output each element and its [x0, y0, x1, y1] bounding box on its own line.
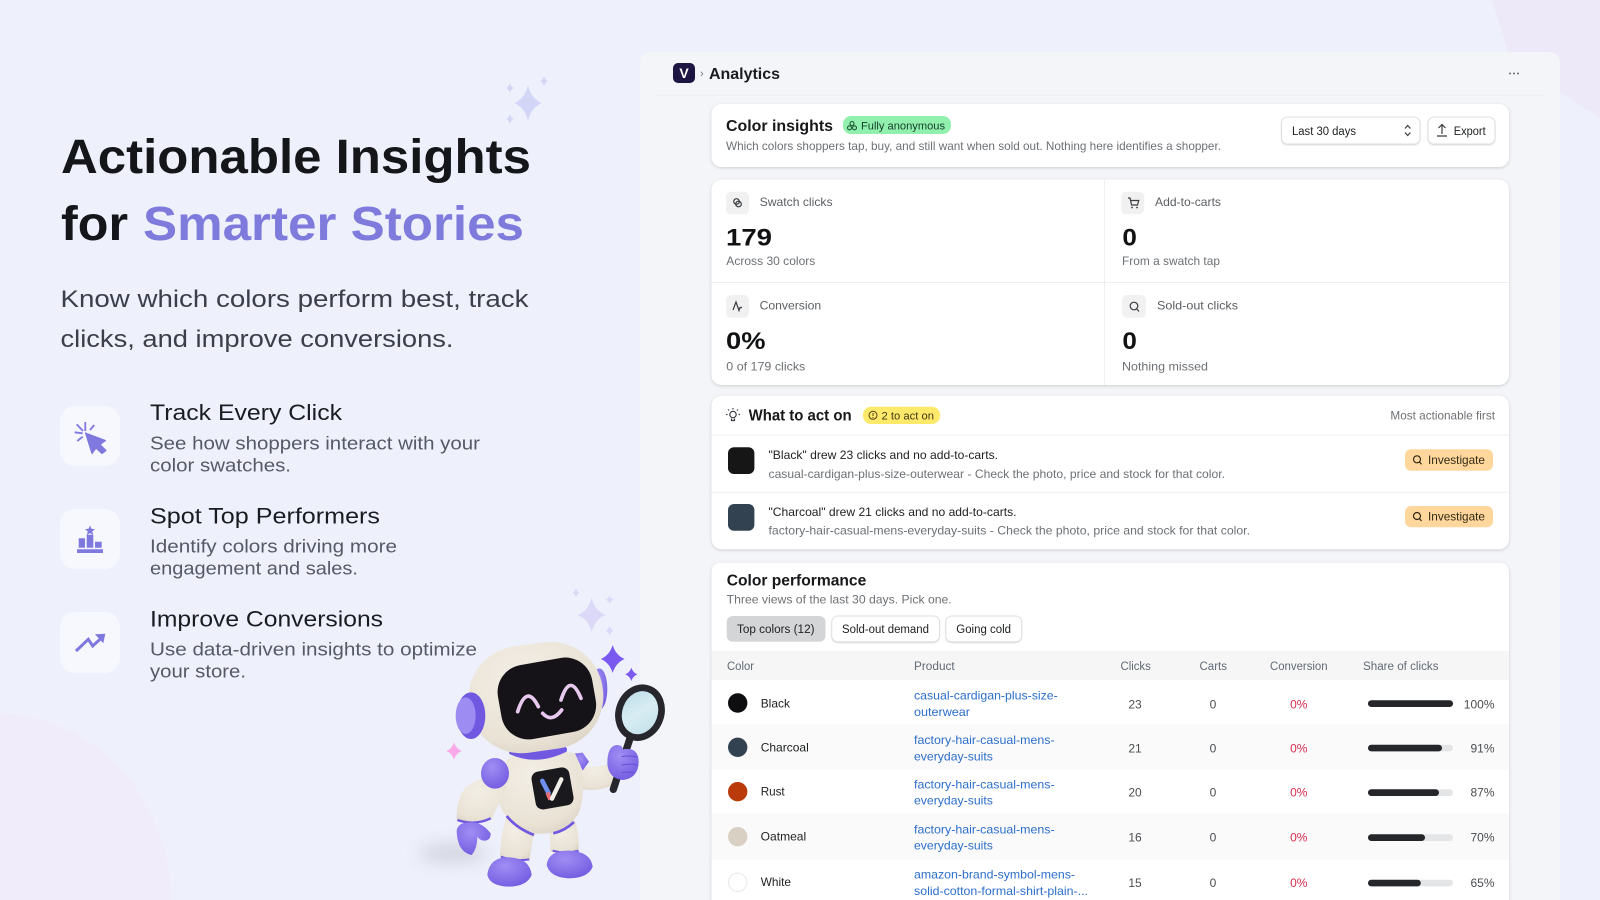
row: black: 0% — [1290, 697, 1308, 711]
table header: Share of clicks — [1363, 661, 1439, 673]
row: rust: everyday-suits — [914, 794, 993, 808]
button: export — [1428, 117, 1495, 144]
row: charcoal: 91% — [1470, 741, 1495, 755]
button: export: Export — [1454, 126, 1486, 138]
app header: V — [679, 65, 689, 81]
row: black: 100% — [1464, 697, 1495, 711]
action row: charcoal: factory-hair-casual-mens-everyday-suits - Check the photo, price and stock for that color. — [768, 524, 1250, 538]
row: charcoal — [728, 733, 1495, 763]
button: investigate: Investigate — [1428, 510, 1485, 524]
row: white: solid-cotton-formal-shirt-plain-... — [914, 884, 1088, 898]
row: rust: 20 — [1128, 786, 1142, 800]
button: investigate: Investigate — [1428, 453, 1485, 467]
stat: swatch clicks — [726, 192, 833, 268]
hand gripping handle — [607, 745, 639, 780]
table header: Product — [914, 661, 956, 673]
row: rust: 0 — [1210, 786, 1217, 800]
panel: color performance — [712, 563, 1509, 900]
panel: color insights header: Color insights — [726, 118, 833, 135]
table header — [712, 651, 1509, 680]
feature: improve conversions — [60, 606, 477, 681]
row: white — [728, 867, 1495, 898]
row: oatmeal: 0 — [1210, 831, 1217, 845]
row: rust: 0% — [1290, 786, 1308, 800]
table: color performance — [712, 651, 1509, 898]
panel: analytics app window — [640, 52, 1560, 900]
stat: sold-out clicks — [1122, 295, 1238, 374]
row: white: 65% — [1470, 876, 1495, 890]
feature: track every click — [60, 400, 480, 475]
row: charcoal: 0 — [1210, 741, 1217, 755]
tabs: Sold-out demand — [842, 624, 929, 636]
stat: swatch clicks: 179 — [726, 225, 772, 252]
stat: conversion — [726, 295, 821, 374]
action row: black — [728, 447, 1493, 481]
row: white: 0% — [1290, 876, 1308, 890]
row: charcoal: Charcoal — [761, 740, 809, 754]
stat: conversion: 0% — [726, 328, 766, 355]
feature: spot top performers: engagement and sales. — [150, 558, 358, 578]
body — [495, 746, 589, 835]
left arm and hand — [457, 758, 509, 855]
icon: podium with star — [60, 509, 120, 569]
feature: spot top performers: Identify colors driving more — [150, 536, 397, 556]
title: Actionable Insights — [61, 131, 531, 184]
stat: swatch clicks: Across 30 colors — [726, 254, 815, 268]
row: rust: 87% — [1470, 786, 1495, 800]
row: rust: factory-hair-casual-mens- — [914, 777, 1055, 791]
panel: color performance: Three views of the last 30 days. Pick one. — [727, 592, 952, 606]
row: white: amazon-brand-symbol-mens- — [914, 867, 1075, 881]
robot mascot with magnifying glass — [418, 588, 668, 887]
tabs: Going cold — [956, 624, 1011, 636]
row: charcoal: 21 — [1128, 741, 1142, 755]
stat: sold-out clicks: Nothing missed — [1122, 360, 1208, 374]
row: black: 0 — [1210, 697, 1217, 711]
panel: what to act on: What to act on — [749, 407, 852, 424]
action row: charcoal — [728, 504, 1493, 538]
subtitle: Know which colors perform best, track — [60, 286, 530, 313]
row: black — [728, 688, 1495, 719]
panel: what to act on — [712, 396, 1509, 549]
panel: what to act on: Most actionable first — [1390, 408, 1496, 422]
row: oatmeal: everyday-suits — [914, 839, 993, 853]
dropdown: last 30 days: Last 30 days — [1292, 126, 1356, 138]
panel: color insights header: Which colors shoppers tap, buy, and still want when sold out. Nothing here identifies a shopper. — [726, 139, 1221, 153]
badge: fully anonymous: Fully anonymous — [861, 120, 945, 132]
row: white: 15 — [1128, 876, 1142, 890]
icon: trend arrow — [60, 612, 120, 673]
icon: click cursor — [60, 406, 120, 466]
row: charcoal: everyday-suits — [914, 749, 993, 763]
panel: stats grid — [712, 180, 1509, 385]
row: oatmeal: 16 — [1128, 831, 1142, 845]
stat: add-to-carts: From a swatch tap — [1122, 254, 1220, 268]
table header: Clicks — [1120, 661, 1151, 673]
chest logo — [530, 766, 575, 811]
button: investigate — [1405, 506, 1493, 527]
row: black: casual-cardigan-plus-size- — [914, 688, 1058, 702]
row: oatmeal: factory-hair-casual-mens- — [914, 822, 1055, 836]
sparkles around robot — [446, 588, 637, 760]
row: oatmeal: 70% — [1470, 831, 1495, 845]
row: rust — [728, 777, 1495, 808]
app header: › — [700, 68, 704, 80]
action row: charcoal: "Charcoal" drew 21 clicks and no add-to-carts. — [768, 505, 1016, 519]
stat: conversion: 0 of 179 clicks — [726, 360, 805, 374]
app header: Analytics — [709, 66, 780, 83]
stat: sold-out clicks: Sold-out clicks — [1157, 298, 1238, 312]
row: oatmeal: 0% — [1290, 831, 1308, 845]
dropdown: last 30 days — [1282, 117, 1420, 144]
badge: 2 to act on: 2 to act on — [882, 410, 934, 422]
feature: improve conversions: Use data-driven insights to optimize — [150, 639, 477, 659]
app header — [673, 63, 1519, 83]
table header: Conversion — [1270, 661, 1328, 673]
table header: Carts — [1200, 661, 1227, 673]
action row: black: casual-cardigan-plus-size-outerwear - Check the photo, price and stock for that color. — [768, 467, 1225, 481]
panel: color insights header — [712, 104, 1509, 167]
stat: swatch clicks: Swatch clicks — [760, 195, 833, 209]
stat: conversion: Conversion — [760, 298, 821, 312]
icon: light bulb — [726, 408, 740, 420]
magnifying glass — [612, 682, 668, 789]
row: white: 0 — [1210, 876, 1217, 890]
tabs — [727, 616, 1022, 642]
badge: 2 to act on — [863, 407, 940, 424]
sparkles above title — [506, 76, 548, 124]
head — [456, 635, 610, 760]
badge: fully anonymous — [843, 116, 951, 134]
legs and feet — [487, 818, 593, 887]
subtitle: clicks, and improve conversions. — [60, 326, 454, 353]
button: investigate — [1405, 449, 1493, 471]
tabs: Top colors (12) — [737, 624, 815, 636]
row: black: 23 — [1128, 697, 1142, 711]
feature: improve conversions: Improve Conversions — [150, 606, 383, 631]
row: charcoal: factory-hair-casual-mens- — [914, 733, 1055, 747]
feature: track every click: See how shoppers interact with your — [150, 433, 480, 453]
stat: add-to-carts: Add-to-carts — [1155, 195, 1221, 209]
row: oatmeal: Oatmeal — [761, 830, 806, 844]
table header: Color — [727, 661, 754, 673]
feature: improve conversions: your store. — [150, 661, 246, 681]
title: Smarter Stories — [143, 198, 524, 251]
row: black: Black — [761, 696, 791, 710]
feature: track every click: color swatches. — [150, 455, 291, 475]
far arm — [578, 762, 617, 790]
visor face — [493, 653, 600, 744]
feature: spot top performers — [60, 503, 397, 578]
title — [61, 131, 531, 251]
feature: spot top performers: Spot Top Performers — [150, 503, 380, 528]
subtitle — [60, 286, 530, 353]
action row: black: "Black" drew 23 clicks and no add-to-carts. — [768, 448, 998, 462]
row: black: outerwear — [914, 705, 970, 719]
title: for — [61, 198, 128, 251]
feature: track every click: Track Every Click — [150, 400, 343, 425]
row: oatmeal — [728, 822, 1495, 853]
row: rust: Rust — [761, 785, 785, 799]
stat: sold-out clicks: 0 — [1122, 328, 1137, 355]
row: charcoal: 0% — [1290, 741, 1308, 755]
stat: add-to-carts — [1121, 192, 1221, 268]
stat: add-to-carts: 0 — [1122, 225, 1137, 252]
panel: color performance: Color performance — [727, 573, 866, 590]
row: white: White — [761, 875, 791, 889]
